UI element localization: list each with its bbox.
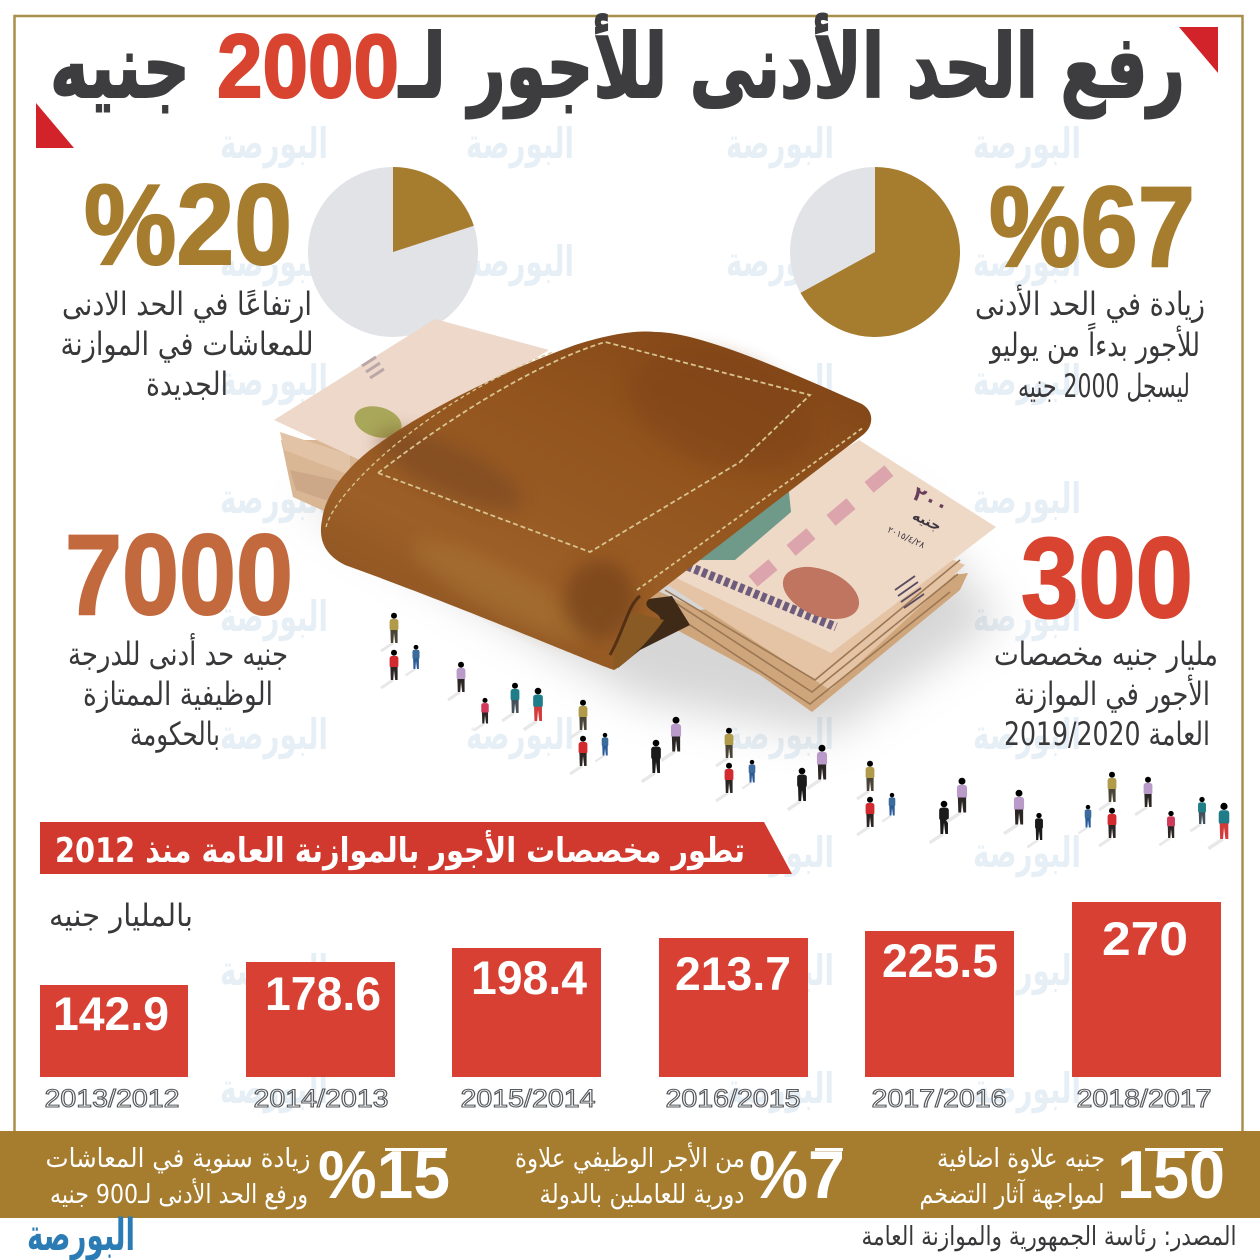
watermarks: البورصة	[973, 592, 1081, 642]
bar 2014/2015: 2015/2014	[460, 1085, 596, 1113]
stat: 300 billion: الأجور في الموازنة	[1014, 674, 1210, 713]
stat: 300 billion	[994, 515, 1218, 753]
bar 2016/2017	[865, 931, 1014, 1113]
stat: 20 percent: %20	[84, 162, 292, 289]
fact: 15 percent: %15	[318, 1137, 450, 1213]
watermarks: البورصة	[466, 356, 574, 406]
bar 2016/2017: 2017/2016	[872, 1085, 1006, 1113]
pie chart: 20%	[308, 167, 478, 337]
banknotes in wallet, right: ٢٠١٥/٤/٢٨	[886, 525, 926, 551]
bar 2013/2014	[246, 962, 395, 1113]
bar 2016/2017: 225.5	[882, 934, 998, 987]
stat: 300 billion: العامة 2019/2020	[1004, 715, 1210, 753]
stat: 67 percent: ليسجل 2000 جنيه	[1018, 367, 1190, 405]
watermarks: البورصة	[220, 119, 328, 169]
bar 2017/2018: 270	[1102, 912, 1188, 965]
bar 2013/2014: 178.6	[265, 967, 381, 1020]
title: 2000	[217, 17, 399, 117]
stat: 7000: الوظيفية الممتازة	[83, 675, 273, 713]
bar 2015/2016	[659, 938, 808, 1113]
walking people	[381, 613, 1229, 849]
stat: 20 percent: ارتفاعًا في الحد الادنى	[62, 285, 312, 323]
stat: 300 billion: 300	[1021, 515, 1193, 642]
banknotes in wallet, right	[640, 440, 996, 712]
stat: 67 percent: %67	[989, 164, 1195, 291]
stat: 300 billion: مليار جنيه مخصصات	[994, 635, 1218, 673]
fact: 150: جنيه علاوة اضافية	[937, 1144, 1105, 1174]
watermarks: البورصة	[466, 237, 574, 287]
fact: 15 percent	[46, 1137, 450, 1213]
watermarks	[220, 119, 1081, 1114]
wallet	[321, 326, 871, 670]
chart heading ribbon: تطور مخصصات الأجور بالموازنة العامة منذ 2012	[55, 829, 745, 871]
wallet pocket shadow	[618, 596, 690, 668]
watermarks: البورصة	[726, 119, 834, 169]
chart unit label: بالمليار جنيه	[49, 898, 193, 934]
fact: 150: 150	[1117, 1137, 1225, 1213]
fact: 7 percent: دورية للعاملين بالدولة	[540, 1180, 744, 1210]
stat: 20 percent: للمعاشات في الموازنة	[60, 325, 314, 363]
watermarks: البورصة	[973, 828, 1081, 878]
bar 2012/2013: 2013/2012	[44, 1085, 180, 1113]
watermarks: البورصة	[220, 946, 328, 996]
corner triangle: top right	[1179, 27, 1218, 73]
watermarks: البورصة	[726, 946, 834, 996]
bar 2017/2018: 2018/2017	[1076, 1085, 1212, 1113]
watermarks: البورصة	[466, 119, 574, 169]
fact: 150	[920, 1137, 1225, 1213]
watermarks: البورصة	[973, 710, 1081, 760]
watermarks: البورصة	[726, 1064, 834, 1114]
watermarks: البورصة	[726, 710, 834, 760]
stat: 7000: بالحكومة	[130, 715, 220, 753]
watermarks: البورصة	[973, 946, 1081, 996]
banknotes behind wallet, left	[274, 319, 549, 512]
watermarks: البورصة	[726, 237, 834, 287]
watermarks: البورصة	[973, 1064, 1081, 1114]
publisher logo: البورصة	[27, 1210, 135, 1260]
stitching	[378, 342, 810, 552]
bar chart	[40, 902, 1221, 1113]
watermarks: البورصة	[220, 237, 328, 287]
title: جنيه	[50, 15, 190, 118]
pie chart: 67%	[790, 167, 960, 337]
fact: 7 percent: %7	[749, 1137, 845, 1213]
stat: 20 percent	[60, 162, 314, 403]
bottom gold band	[0, 1131, 1260, 1218]
bar 2012/2013	[40, 985, 188, 1113]
watermarks: البورصة	[973, 474, 1081, 524]
watermarks: البورصة	[726, 356, 834, 406]
stat: 67 percent: للأجور بدءاً من يوليو	[988, 322, 1200, 364]
stat: 7000	[65, 512, 293, 753]
watermarks: البورصة	[220, 1064, 328, 1114]
bar 2017/2018	[1072, 902, 1221, 1113]
watermarks: البورصة	[726, 828, 834, 878]
title	[50, 13, 1185, 119]
fact: 7 percent: من الأجر الوظيفي علاوة	[515, 1141, 745, 1174]
fact: 150: لمواجهة آثار التضخم	[920, 1178, 1104, 1210]
fact: 7 percent	[515, 1137, 845, 1213]
watermarks: البورصة	[220, 710, 328, 760]
watermarks: البورصة	[973, 237, 1081, 287]
banknotes in wallet, right: جنيه	[910, 508, 944, 535]
bar 2014/2015	[452, 948, 601, 1113]
fact: 15 percent: ورفع الحد الأدنى لـ900 جنيه	[50, 1177, 308, 1210]
leather patches	[367, 326, 828, 656]
watermarks: البورصة	[220, 356, 328, 406]
bar 2014/2015: 198.4	[471, 951, 587, 1004]
bar 2013/2014: 2014/2013	[254, 1085, 388, 1113]
wallet shadow	[300, 460, 1000, 735]
stat: 67 percent	[975, 164, 1205, 405]
bar 2015/2016: 2016/2015	[666, 1085, 800, 1113]
stat: 20 percent: الجديدة	[146, 365, 228, 403]
stat: 7000: جنيه حد أدنى للدرجة	[68, 633, 288, 673]
stat: 67 percent: زيادة في الحد الأدنى	[975, 284, 1205, 323]
stat: 7000: 7000	[65, 512, 293, 639]
watermarks: البورصة	[220, 592, 328, 642]
bar 2015/2016: 213.7	[675, 947, 791, 1000]
watermarks: البورصة	[973, 356, 1081, 406]
banknotes in wallet, right: ٢٠٠	[909, 481, 953, 518]
bar 2012/2013: 142.9	[53, 987, 169, 1040]
corner triangle: bottom left	[36, 103, 74, 148]
fact: 15 percent: زيادة سنوية في المعاشات	[46, 1144, 310, 1174]
watermarks: البورصة	[973, 119, 1081, 169]
wallet corner fold	[614, 612, 664, 670]
watermarks: البورصة	[220, 474, 328, 524]
watermarks: البورصة	[466, 710, 574, 760]
